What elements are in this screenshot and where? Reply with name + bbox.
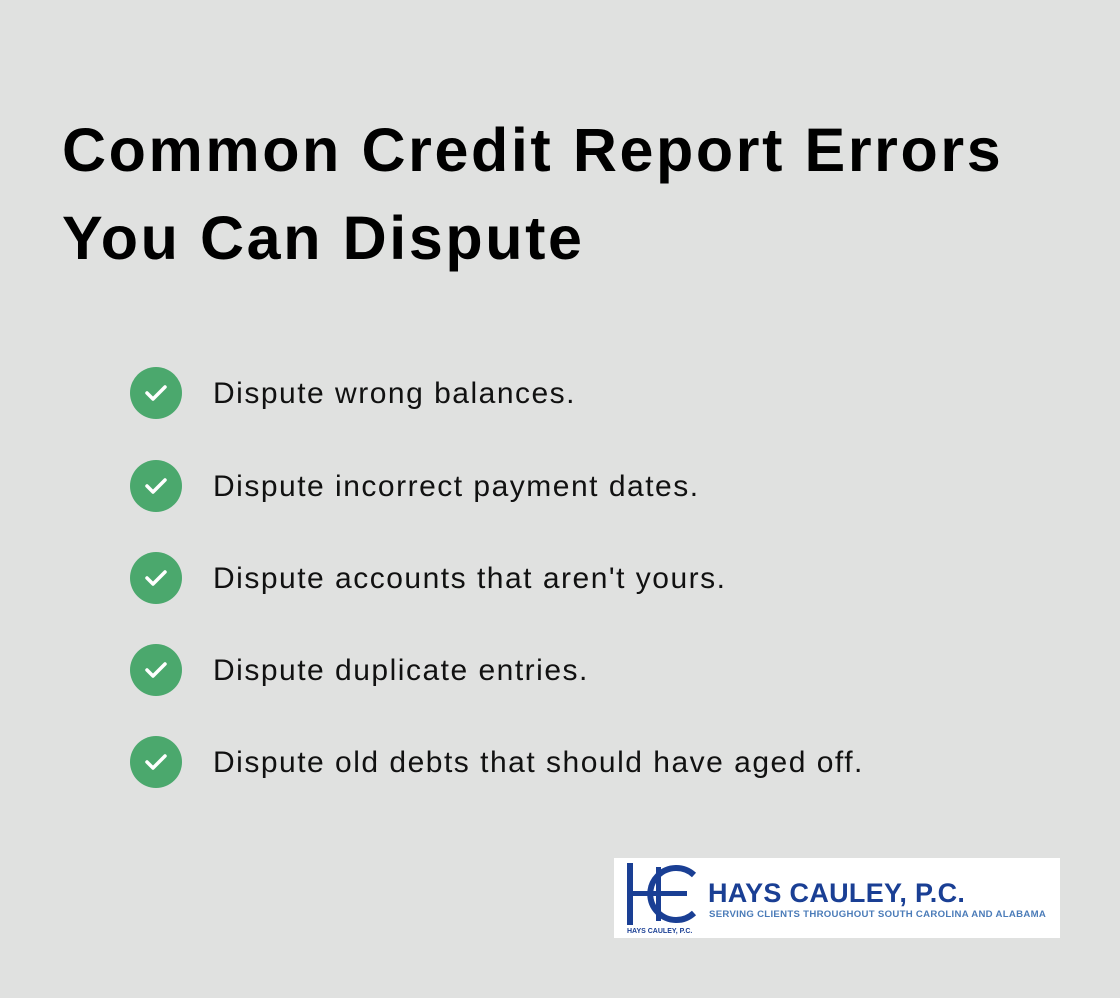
item 3: Dispute accounts that aren't yours. (213, 562, 726, 595)
item 4 (130, 644, 589, 696)
logo small text: HAYS CAULEY, P.C. (627, 928, 692, 935)
item 2 (130, 460, 700, 512)
item 4: Dispute duplicate entries. (213, 654, 589, 687)
item 3 (130, 552, 726, 604)
item 1 (130, 367, 576, 419)
logo (614, 858, 1060, 938)
item 2: Dispute incorrect payment dates. (213, 470, 700, 503)
item 5 (130, 736, 864, 788)
item 1: Dispute wrong balances. (213, 377, 576, 410)
title: You Can Dispute (62, 204, 585, 272)
item 5: Dispute old debts that should have aged off. (213, 746, 864, 779)
icon: HC monogram (627, 863, 696, 925)
logo name: HAYS CAULEY, P.C. (708, 878, 965, 908)
checklist (130, 367, 864, 788)
title: Common Credit Report Errors (62, 116, 1003, 184)
logo tagline: SERVING CLIENTS THROUGHOUT SOUTH CAROLINA AND ALABAMA (709, 909, 1046, 920)
title (62, 116, 1003, 272)
